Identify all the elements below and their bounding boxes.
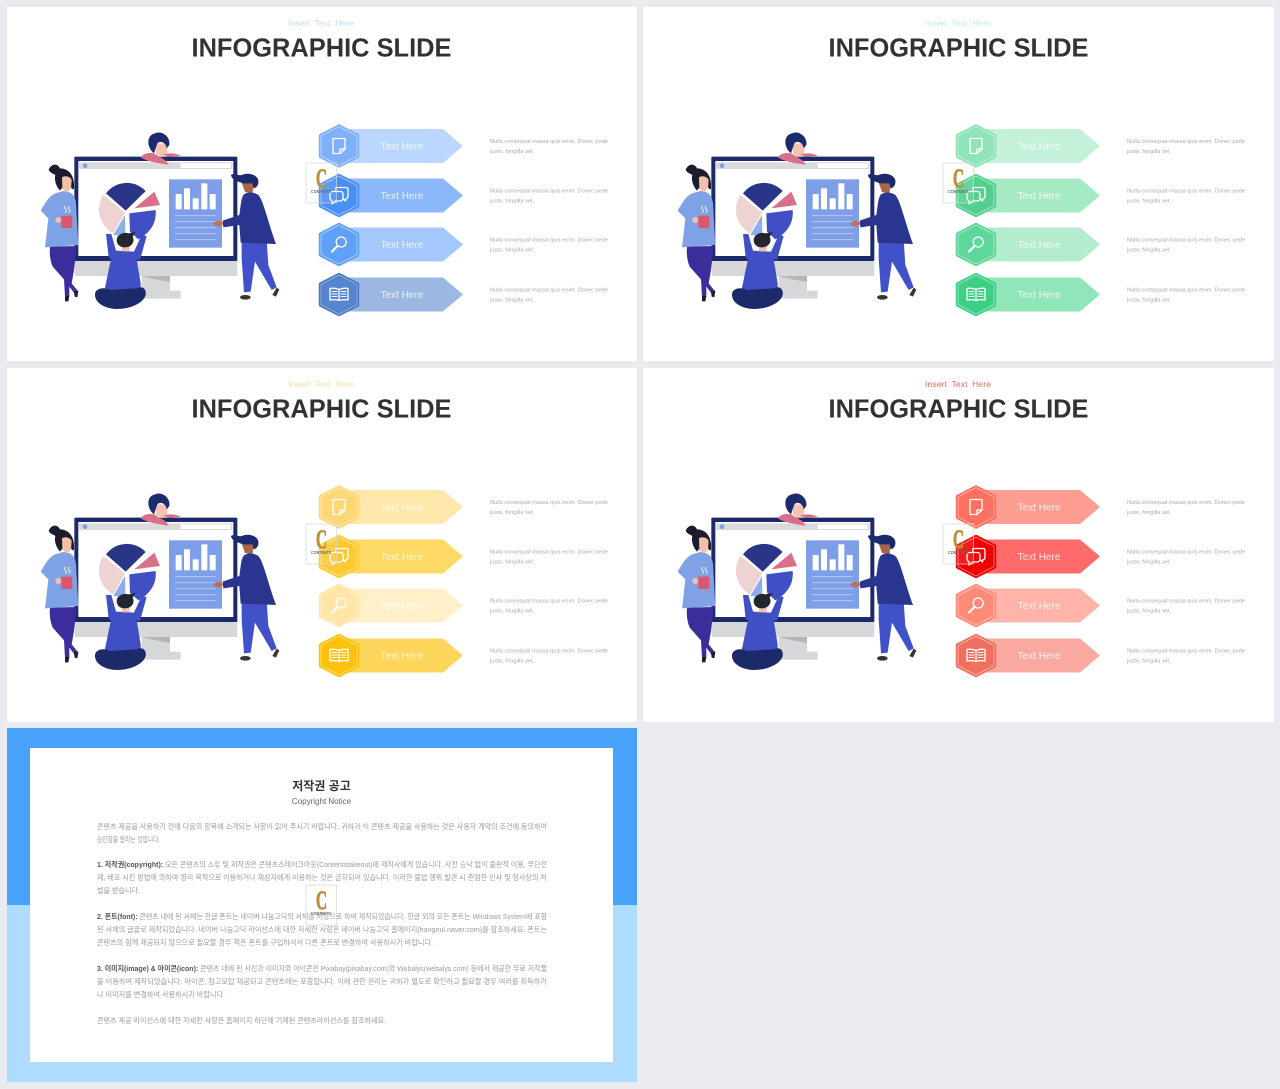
notice section 1: [97, 860, 547, 895]
body text: Nulla consequat massa quis enim. Donec pede: [490, 288, 608, 294]
row 2: Text Here: [1018, 191, 1061, 202]
row 4: Text Here: [1018, 651, 1061, 662]
body text: Nulla consequat massa quis enim. Donec pede: [1127, 188, 1245, 194]
notice section 3: 을 이용하여 제작되었습니다. 아이콘, 참고모탑 제공되고 콘텐츠에는 포함합니다. 이에 관한 권리는 귀하가 별도로 확인하고 필요할 경우 여러를 취득하거: [97, 977, 547, 986]
body text: Nulla consequat massa quis enim. Donec pede: [490, 238, 608, 244]
row 3: [958, 586, 1100, 626]
row 4: [958, 636, 1100, 676]
body text: justo, fringilla vel,: [1126, 510, 1171, 516]
row 1: Text Here: [381, 502, 424, 514]
body text: justo, fringilla vel,: [489, 560, 534, 566]
watermark: [943, 163, 974, 203]
row 4: [320, 636, 463, 676]
body text: Nulla consequat massa quis enim. Donec pede: [1127, 288, 1245, 294]
body text: [489, 139, 608, 304]
body text: [1126, 139, 1245, 304]
illustration: team around monitor: [41, 132, 279, 309]
row 4: Text Here: [381, 290, 424, 301]
row 2: [320, 176, 463, 216]
panel: red slide: [643, 368, 1274, 722]
body text: Nulla consequat massa quis enim. Donec pede: [1127, 598, 1245, 604]
body text: Nulla consequat massa quis enim. Donec pede: [490, 550, 608, 556]
notice section 3: [97, 964, 547, 999]
notice section 1: 벌을 받습니다.: [97, 886, 140, 895]
illustration: team around monitor: [678, 132, 916, 309]
notice section 2: 된 서체의 글꼴로 제작되었습니다. 네이버 나눔고딕 라이선스에 대한 자세한 사항은 네이버 나눔고딕 홈페이지(hangeul.naver.com)를 참조하세요. 폰트는: [97, 925, 547, 934]
panel: blue slide: [7, 7, 637, 361]
body text: Nulla consequat massa quis enim. Donec pede: [1127, 500, 1245, 506]
subtitle: Insert Text Here: [288, 18, 354, 28]
panel: green slide: [643, 7, 1274, 361]
body text: Nulla consequat massa quis enim. Donec pede: [490, 598, 608, 604]
notice section 2: [97, 912, 547, 947]
watermark: [306, 524, 336, 564]
body text: Nulla consequat massa quis enim. Donec pede: [1127, 139, 1245, 145]
body text: justo, fringilla vel,: [1126, 658, 1171, 664]
row 3: Text Here: [1018, 240, 1061, 251]
body text: justo, fringilla vel,: [489, 510, 534, 516]
row 4: [958, 274, 1100, 314]
notice section 1: 재, 배포 시킨 방법에 의하여 영리 목적으로 이용하거나 제삼자에게 이용하는 것은 금지되어 있습니다. 이러한 불법 행위 발견 시 준엄한 민사 및 형사상의 처: [97, 873, 547, 882]
subtitle: Insert Text Here: [925, 18, 991, 28]
body text: justo, fringilla vel,: [1126, 248, 1171, 254]
title: INFOGRAPHIC SLIDE: [828, 34, 1088, 62]
body text: justo, fringilla vel,: [1126, 298, 1171, 304]
row 1: [958, 126, 1100, 166]
body text: justo, fringilla vel,: [489, 658, 534, 664]
row 3: Text Here: [1018, 601, 1061, 612]
row 1: [320, 126, 463, 166]
notice intro: 콘텐츠 제공을 사용하기 전에 다음의 항목에 소개되는 사항이 읽어 주시기 바랍니다. 귀하가 이 콘텐츠 제공을 사용하는 것은 사용자 계약의 조건에 동의하여: [97, 822, 547, 831]
panel: yellow slide: [7, 368, 637, 722]
body text: justo, fringilla vel,: [489, 608, 534, 614]
body text: justo, fringilla vel,: [1126, 560, 1171, 566]
illustration: team around monitor: [41, 493, 279, 670]
body text: Nulla consequat massa quis enim. Donec pede: [1127, 648, 1245, 654]
row 1: Text Here: [1018, 142, 1061, 152]
notice section 2: 2. 폰트(font): 콘텐츠 내에 된 서체는 한글 폰트는 네이버 나눔고딕의 서체를 바탕으로 하여 제작되었습니다. 한글 외의 모든 폰트는 Windows System에 포함: [97, 912, 547, 921]
row 2: [958, 176, 1100, 216]
row 1: Text Here: [381, 142, 424, 152]
row 3: [958, 224, 1100, 264]
row 2: [958, 536, 1100, 576]
notice intro: [97, 822, 547, 844]
body text: justo, fringilla vel,: [489, 198, 534, 204]
row 2: Text Here: [1018, 552, 1061, 563]
subtitle: Insert Text Here: [288, 379, 354, 389]
row 3: [320, 224, 463, 264]
body text: justo, fringilla vel,: [489, 248, 534, 254]
body text: justo, fringilla vel,: [489, 149, 534, 155]
title: INFOGRAPHIC SLIDE: [192, 396, 452, 424]
row 2: Text Here: [381, 191, 424, 202]
body text: Nulla consequat massa quis enim. Donec pede: [1127, 550, 1245, 556]
row 3: Text Here: [381, 601, 424, 612]
body text: Nulla consequat massa quis enim. Donec pede: [490, 139, 608, 145]
body text: Nulla consequat massa quis enim. Donec pede: [490, 500, 608, 506]
body text: Nulla consequat massa quis enim. Donec pede: [490, 188, 608, 194]
watermark: [943, 524, 974, 564]
watermark: [306, 163, 336, 203]
notice footer line: 콘텐츠 제공 라이선스에 대한 자세한 사항은 홈페이지 하단에 기재된 콘텐츠라이선스를 참조하세요.: [97, 1016, 386, 1025]
title: INFOGRAPHIC SLIDE: [192, 34, 452, 62]
row 3: [320, 586, 463, 626]
notice section 1: 1. 저작권(copyright): 모든 콘텐츠의 소유 및 저작권은 콘텐츠스테이크아웃(Contentstakeout)에 제작사에게 있습니다. 사전 승낙 없이 출판적 이용, 무단전: [97, 860, 547, 869]
title: INFOGRAPHIC SLIDE: [828, 396, 1088, 424]
row 1: Text Here: [1018, 502, 1061, 514]
body text: Nulla consequat massa quis enim. Donec pede: [490, 648, 608, 654]
panel: copyright notice: [7, 728, 637, 1082]
row 4: [320, 274, 463, 314]
illustration: team around monitor: [678, 493, 916, 670]
row 3: Text Here: [381, 240, 424, 251]
notice intro: 승인함을 알리는 것입니다.: [97, 835, 160, 844]
row 2: Text Here: [381, 552, 424, 563]
row 2: [320, 536, 463, 576]
row 4: Text Here: [381, 651, 424, 662]
notice subheading: Copyright Notice: [292, 797, 352, 806]
notice section 3: 나 이미지를 변경하여 사용하시기 바랍니다.: [97, 990, 225, 999]
notice section 2: 콘텐츠의 함께 제공되지 않으므로 필요할 경우 적은 폰트를 구입하셔서 다른 폰트로 변경하여 사용하시기 바랍니다.: [97, 938, 433, 947]
subtitle: Insert Text Here: [925, 379, 991, 389]
row 4: Text Here: [1018, 290, 1061, 301]
body text: justo, fringilla vel,: [1126, 608, 1171, 614]
body text: justo, fringilla vel,: [489, 298, 534, 304]
body text: Nulla consequat massa quis enim. Donec pede: [1127, 238, 1245, 244]
body text: [489, 500, 608, 664]
notice section 3: 3. 이미지(image) & 아이콘(icon): 콘텐츠 내에 된 사진과 이미지와 아이콘은 Pixabay(pixabay.com)와 Webalys(webalys.com) 등에서 제공한 무료 저작물: [97, 964, 547, 973]
notice heading: 저작권 공고: [292, 778, 351, 793]
body text: justo, fringilla vel,: [1126, 198, 1171, 204]
watermark: [306, 885, 336, 925]
row 1: [320, 487, 463, 527]
body text: justo, fringilla vel,: [1126, 149, 1171, 155]
body text: [1126, 500, 1245, 664]
row 1: [958, 487, 1100, 527]
